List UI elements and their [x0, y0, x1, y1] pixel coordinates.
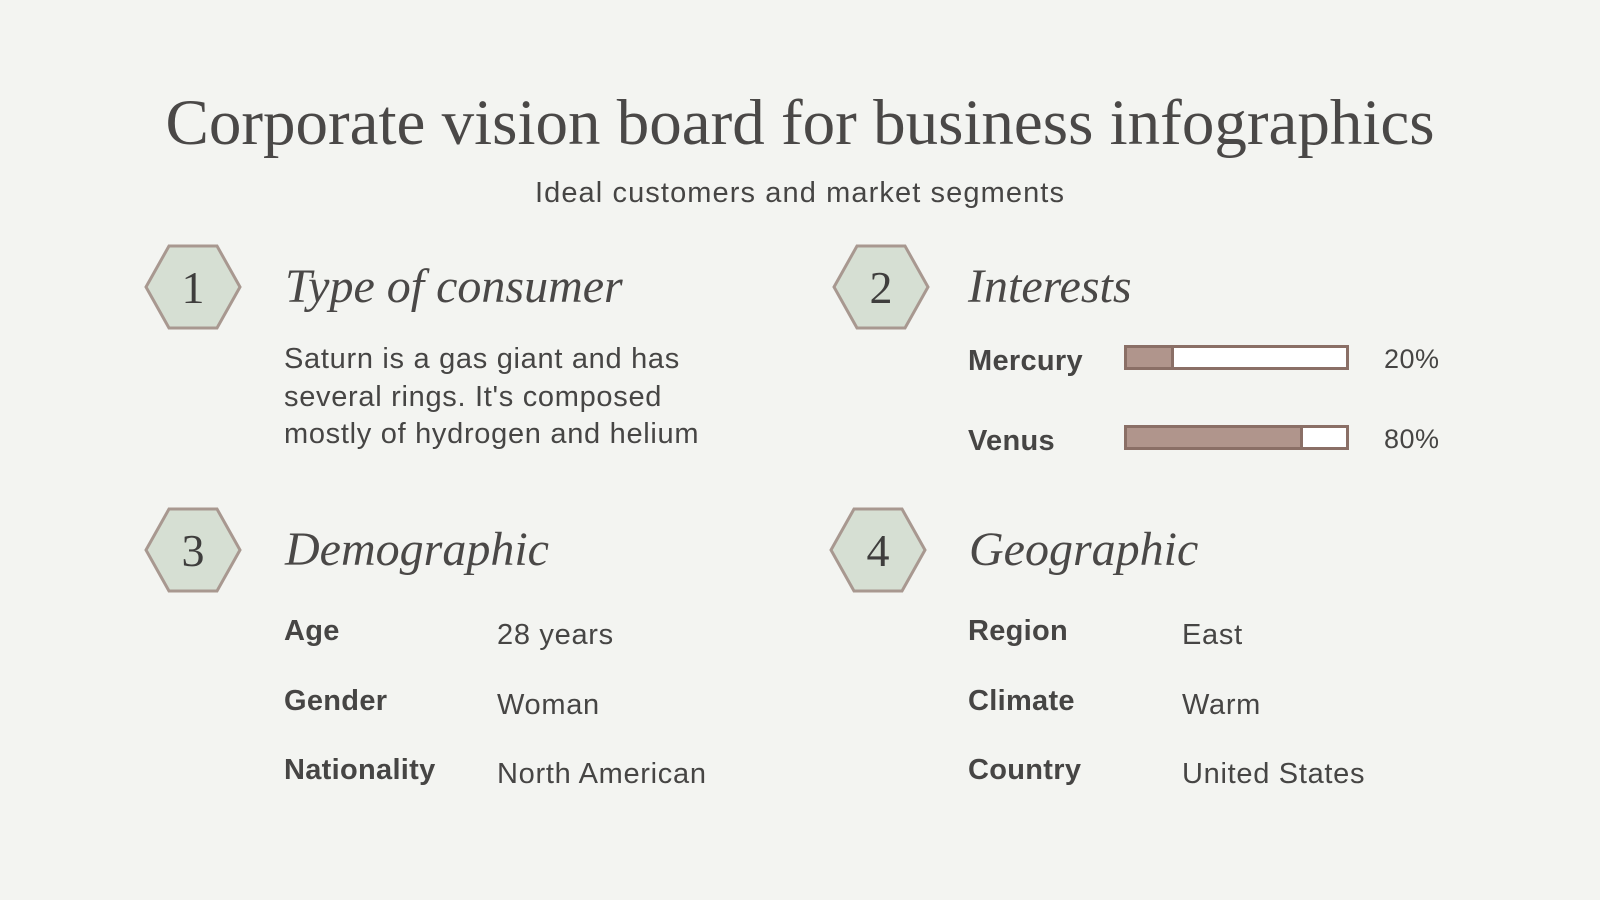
table: geographic [968, 615, 1365, 790]
table: geographic: United States [1182, 758, 1365, 790]
icon: hexagon 1 [144, 244, 242, 330]
icon: hexagon 4: 4 [866, 525, 890, 576]
bar: Mercury 20% [1124, 345, 1349, 370]
text block: consumer description: Saturn is a gas giant and has [284, 343, 680, 375]
title: Corporate vision board for business infographics [165, 87, 1435, 159]
table: geographic: Region [968, 615, 1068, 647]
icon: hexagon 1: 1 [182, 262, 204, 313]
icon: hexagon 3 [144, 508, 242, 592]
heading: interests: Interests [968, 260, 1132, 313]
table: demographic: Nationality [284, 754, 436, 786]
table: geographic: Country [968, 754, 1081, 786]
table: demographic: 28 years [497, 619, 614, 651]
icon: hexagon 2 [832, 244, 930, 330]
text block: consumer description: mostly of hydrogen and helium [284, 418, 699, 450]
value: 80%: 80% [1384, 424, 1440, 454]
table: geographic: Climate [968, 685, 1075, 717]
heading: type of consumer: Type of consumer [285, 260, 623, 313]
bar chart: interests [968, 345, 1083, 457]
table: geographic: Warm [1182, 689, 1261, 721]
subtitle: Ideal customers and market segments [535, 177, 1065, 209]
table: geographic: East [1182, 619, 1243, 651]
heading: demographic: Demographic [285, 523, 549, 576]
text block: consumer description [284, 343, 699, 450]
table: demographic: Age [284, 615, 340, 647]
table: demographic [284, 615, 707, 790]
bar: Venus 80% [1124, 425, 1349, 450]
text block: consumer description: several rings. It's composed [284, 380, 662, 412]
icon: hexagon 3: 3 [182, 525, 204, 576]
table: demographic: Gender [284, 685, 387, 717]
icon: hexagon 4 [829, 508, 927, 592]
label: Mercury: Mercury [968, 345, 1083, 377]
table: demographic: North American [497, 758, 707, 790]
label: Venus: Venus [968, 425, 1055, 457]
icon: hexagon 2: 2 [870, 262, 892, 313]
value: 20%: 20% [1384, 344, 1440, 374]
table: demographic: Woman [497, 689, 600, 721]
heading: geographic: Geographic [969, 523, 1198, 576]
